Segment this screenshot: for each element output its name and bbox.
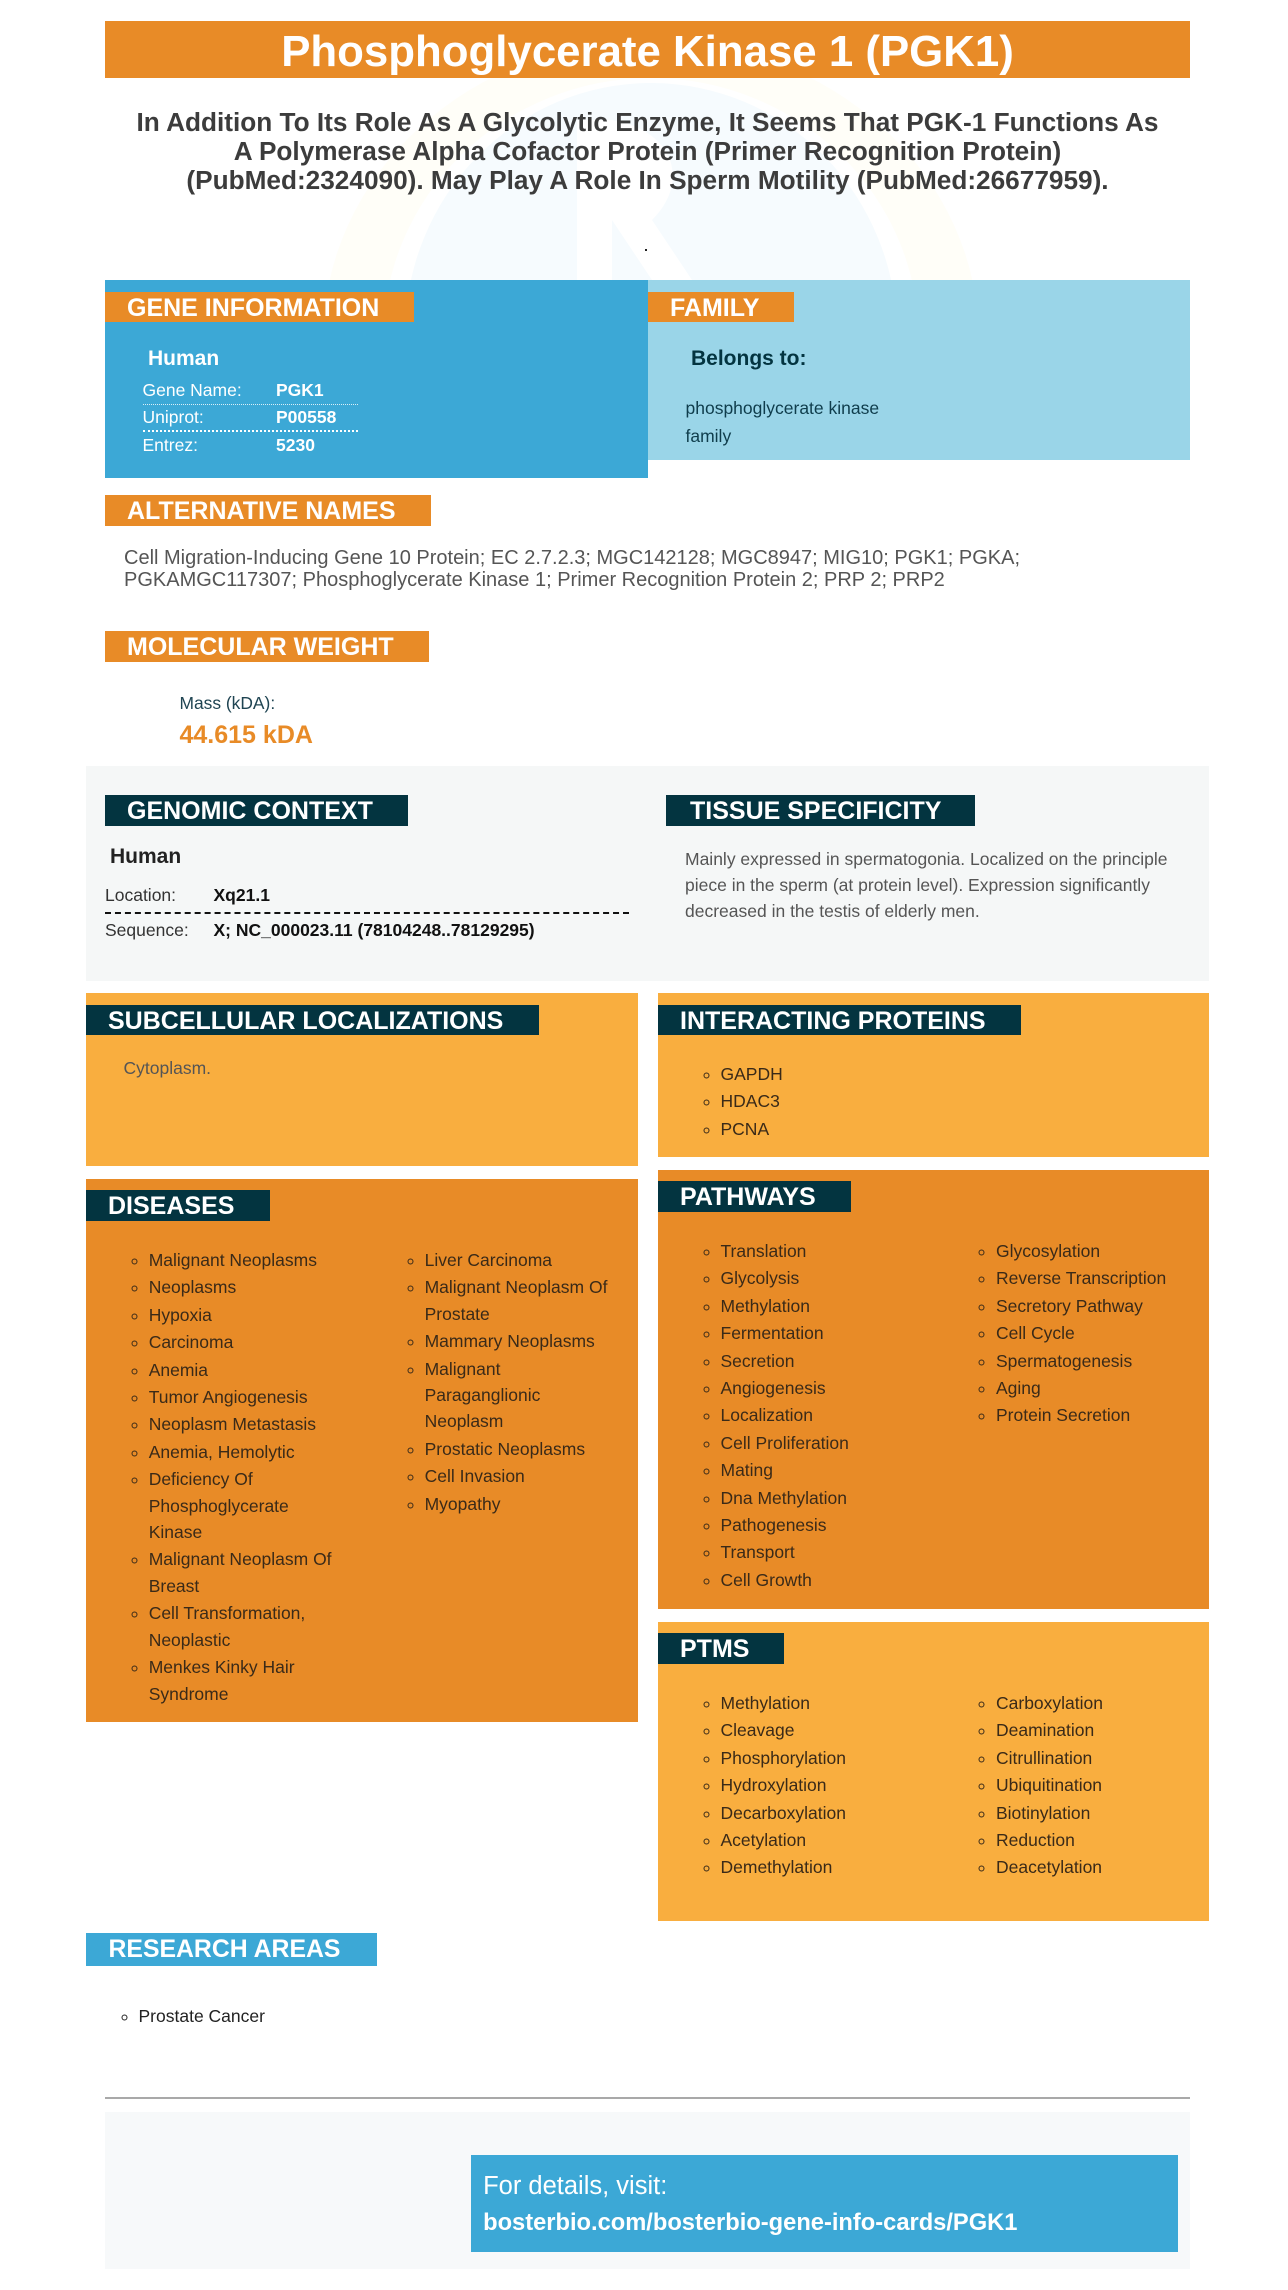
panel: genomic context and tissue specificity bbox=[86, 766, 1209, 981]
disease list column 1: Kinase bbox=[149, 1522, 202, 1542]
pathway list column 1: Cell Proliferation bbox=[720, 1433, 849, 1453]
ptm list column 2: Deamination bbox=[996, 1720, 1094, 1740]
pathway list column 2: Reverse Transcription bbox=[996, 1268, 1166, 1288]
disease list column 2: Malignant bbox=[425, 1359, 500, 1379]
heading: alternative names: ALTERNATIVE NAMES bbox=[127, 497, 396, 525]
species label: Human bbox=[148, 346, 219, 370]
title: Phosphoglycerate Kinase 1 (PGK1) bbox=[281, 27, 1014, 76]
research area list: Prostate Cancer bbox=[138, 2006, 265, 2026]
disease list column 1: Neoplasm Metastasis bbox=[149, 1414, 316, 1434]
tissue text: decreased in the testis of elderly men. bbox=[685, 901, 980, 921]
disease list column 1: Anemia, Hemolytic bbox=[149, 1442, 295, 1462]
heading: tissue specificity: TISSUE SPECIFICITY bbox=[690, 797, 941, 825]
pathway list column 2: Spermatogenesis bbox=[996, 1351, 1132, 1371]
disease list column 1: Deficiency Of bbox=[149, 1469, 253, 1489]
panel: family bbox=[648, 280, 1190, 460]
family text: family bbox=[686, 426, 731, 446]
heading: pathways bbox=[658, 1181, 851, 1212]
title bbox=[105, 21, 1190, 78]
disease list column 1: Cell Transformation, bbox=[149, 1603, 305, 1623]
belongs to label: Belongs to: bbox=[691, 346, 806, 370]
ptm list column 1: Methylation bbox=[720, 1693, 810, 1713]
disease list column 1: Syndrome bbox=[149, 1684, 228, 1704]
pathway list column 1: Fermentation bbox=[720, 1323, 824, 1343]
panel: diseases bbox=[86, 1179, 638, 1722]
disease list column 1: Malignant Neoplasm Of bbox=[149, 1549, 332, 1569]
heading: ptms bbox=[658, 1633, 784, 1664]
ptm list column 2: Biotinylation bbox=[996, 1803, 1090, 1823]
protein list: HDAC3 bbox=[720, 1091, 780, 1111]
gene name row: Gene Name: bbox=[142, 380, 242, 400]
stray dot bbox=[645, 249, 647, 251]
ptm list column 2: Deacetylation bbox=[996, 1857, 1102, 1877]
disease list column 2: Liver Carcinoma bbox=[425, 1250, 552, 1270]
tissue text bbox=[685, 849, 1168, 921]
disease list column 2: Paraganglionic bbox=[425, 1385, 540, 1405]
pathway list column 1: Secretion bbox=[720, 1351, 794, 1371]
ptm list column 1: Decarboxylation bbox=[720, 1803, 846, 1823]
tissue text: Mainly expressed in spermatogonia. Localized on the principle bbox=[685, 849, 1168, 869]
gene name row bbox=[142, 380, 324, 400]
pathway list column 1: Pathogenesis bbox=[720, 1515, 827, 1535]
disease list column 2: Myopathy bbox=[425, 1494, 500, 1514]
panel: subcellular localizations bbox=[86, 993, 638, 1166]
location row bbox=[105, 884, 270, 904]
panel: ptms bbox=[658, 1622, 1209, 1921]
heading: genomic context: GENOMIC CONTEXT bbox=[127, 797, 373, 825]
location row: Location: bbox=[105, 884, 176, 904]
pathway list column 1: Localization bbox=[720, 1405, 813, 1425]
alternative names text: Cell Migration-Inducing Gene 10 Protein; EC 2.7.2.3; MGC142128; MGC8947; MIG10; PGK1; PGKA; bbox=[124, 546, 1020, 568]
disease list column 2: Prostatic Neoplasms bbox=[425, 1439, 585, 1459]
pathway list column 1: Mating bbox=[720, 1460, 773, 1480]
disease list column 1: Hypoxia bbox=[149, 1305, 212, 1325]
disease list column 2: Cell Invasion bbox=[425, 1466, 525, 1486]
entrez row bbox=[142, 430, 358, 458]
pathway list column 1: Transport bbox=[720, 1542, 795, 1562]
subtitle description: In Addition To Its Role As A Glycolytic Enzyme, It Seems That PGK-1 Functions As bbox=[137, 107, 1158, 137]
dashed divider bbox=[105, 912, 629, 914]
mass label: Mass (kDA): bbox=[180, 693, 275, 713]
disease list column 2 bbox=[408, 1250, 608, 1514]
disease list column 1: Neoplastic bbox=[149, 1630, 230, 1650]
pathway list column 1: Translation bbox=[720, 1241, 806, 1261]
disease list column 1: Menkes Kinky Hair bbox=[149, 1657, 295, 1677]
ptm list column 1: Hydroxylation bbox=[720, 1775, 827, 1795]
protein list: PCNA bbox=[720, 1119, 769, 1139]
callout: details link bbox=[471, 2155, 1178, 2252]
disease list column 1: Carcinoma bbox=[149, 1332, 233, 1352]
ptm list column 1: Cleavage bbox=[720, 1720, 794, 1740]
disease list column 2: Prostate bbox=[425, 1304, 490, 1324]
disease list column 1: Phosphoglycerate bbox=[149, 1496, 289, 1516]
entrez row: Entrez: bbox=[142, 435, 198, 455]
pathway list column 2: Aging bbox=[996, 1378, 1041, 1398]
ptm list column 1: Demethylation bbox=[720, 1857, 832, 1877]
disease list column 1 bbox=[132, 1250, 332, 1704]
heading: subcellular localizations: SUBCELLULAR LOCALIZATIONS bbox=[108, 1007, 503, 1035]
disease list column 1: Anemia bbox=[149, 1360, 208, 1380]
heading: interacting proteins: INTERACTING PROTEINS bbox=[680, 1007, 986, 1035]
watermark logo bbox=[412, 83, 891, 280]
alternative names text: PGKAMGC117307; Phosphoglycerate Kinase 1; Primer Recognition Protein 2; PRP 2; PRP2 bbox=[124, 568, 945, 590]
entrez row: 5230 bbox=[276, 435, 315, 455]
panel: interacting proteins bbox=[658, 993, 1209, 1157]
panel: pathways bbox=[658, 1170, 1209, 1609]
panel: genomic context and tissue specificity: Xq21.1 bbox=[214, 884, 270, 904]
panel: gene information bbox=[105, 280, 648, 478]
pathway list column 2: Secretory Pathway bbox=[996, 1296, 1143, 1316]
callout url: bosterbio.com/bosterbio-gene-info-cards/PGK1 bbox=[483, 2210, 1017, 2236]
pathway list column 1: Dna Methylation bbox=[720, 1488, 847, 1508]
heading: ptms: PTMS bbox=[680, 1635, 749, 1663]
pathway list column 1: Glycolysis bbox=[720, 1268, 799, 1288]
disease list column 1: Malignant Neoplasms bbox=[149, 1250, 317, 1270]
footer rule bbox=[105, 2097, 1190, 2099]
pathway list column 1 bbox=[704, 1241, 849, 1590]
uniprot row: Uniprot: bbox=[142, 406, 204, 426]
heading: molecular weight: MOLECULAR WEIGHT bbox=[127, 633, 394, 661]
heading: research areas: RESEARCH AREAS bbox=[108, 1936, 340, 1963]
heading: family: FAMILY bbox=[670, 294, 759, 322]
heading: family bbox=[648, 292, 794, 322]
sequence row bbox=[105, 920, 535, 940]
ptm list column 1 bbox=[704, 1693, 846, 1877]
disease list column 1: Breast bbox=[149, 1576, 199, 1596]
ptm list column 1: Phosphorylation bbox=[720, 1748, 846, 1768]
pathway list column 2: Protein Secretion bbox=[996, 1405, 1130, 1425]
ptm list column 2: Citrullination bbox=[996, 1748, 1092, 1768]
ptm list column 2: Ubiquitination bbox=[996, 1775, 1102, 1795]
uniprot row bbox=[142, 404, 358, 430]
heading: pathways: PATHWAYS bbox=[680, 1183, 816, 1211]
ptm list column 2 bbox=[978, 1693, 1103, 1877]
disease list column 2: Mammary Neoplasms bbox=[425, 1331, 595, 1351]
family text: phosphoglycerate kinase bbox=[686, 398, 879, 418]
ptm list column 1: Acetylation bbox=[720, 1830, 806, 1850]
disease list column 1: Neoplasms bbox=[149, 1277, 236, 1297]
gene name row: PGK1 bbox=[276, 380, 324, 400]
heading: research areas bbox=[86, 1933, 377, 1966]
disease list column 2: Malignant Neoplasm Of bbox=[425, 1277, 607, 1297]
ptm list column 2: Reduction bbox=[996, 1830, 1075, 1850]
mass value: 44.615 kDA bbox=[180, 721, 313, 749]
ptm list column 2: Carboxylation bbox=[996, 1693, 1103, 1713]
callout label: For details, visit: bbox=[483, 2172, 667, 2200]
sequence row: Sequence: bbox=[105, 920, 189, 940]
heading: diseases bbox=[86, 1190, 270, 1221]
heading: gene information: GENE INFORMATION bbox=[127, 294, 379, 322]
tissue text: piece in the sperm (at protein level). Expression significantly bbox=[685, 875, 1150, 895]
uniprot row: P00558 bbox=[276, 406, 336, 426]
heading: diseases: DISEASES bbox=[108, 1192, 234, 1220]
alternative names text bbox=[124, 546, 1020, 590]
pathway list column 1: Methylation bbox=[720, 1296, 810, 1316]
disease list column 1: Tumor Angiogenesis bbox=[149, 1387, 308, 1407]
pathway list column 2: Cell Cycle bbox=[996, 1323, 1075, 1343]
protein list: GAPDH bbox=[720, 1064, 783, 1084]
protein list bbox=[704, 1064, 783, 1139]
pathway list column 1: Angiogenesis bbox=[720, 1378, 826, 1398]
localization text: Cytoplasm. bbox=[124, 1058, 211, 1078]
subtitle description: A Polymerase Alpha Cofactor Protein (Primer Recognition Protein) bbox=[234, 136, 1061, 166]
panel: genomic context and tissue specificity: X; NC_000023.11 (78104248..78129295) bbox=[214, 920, 535, 940]
species label: Human bbox=[110, 845, 181, 868]
pathway list column 2: Glycosylation bbox=[996, 1241, 1100, 1261]
disease list column 2: Neoplasm bbox=[425, 1411, 503, 1431]
pathway list column 2 bbox=[978, 1241, 1166, 1425]
subtitle description: (PubMed:2324090). May Play A Role In Sperm Motility (PubMed:26677959). bbox=[186, 165, 1109, 195]
subtitle description bbox=[137, 107, 1158, 195]
panel: footer bbox=[105, 2112, 1190, 2269]
pathway list column 1: Cell Growth bbox=[720, 1570, 812, 1590]
family text bbox=[686, 398, 879, 446]
